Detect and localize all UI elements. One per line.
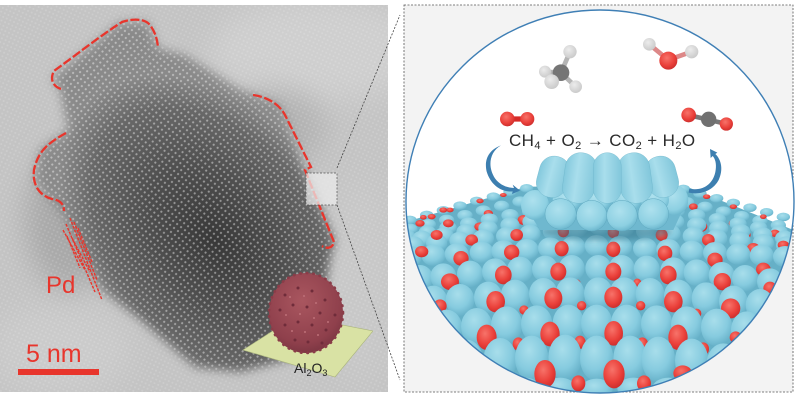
surface row <box>428 278 770 314</box>
selection box <box>306 173 337 205</box>
surface row <box>410 216 791 248</box>
reaction equation: CH <box>509 131 534 150</box>
red dashed outlines of Pd regions <box>34 20 334 248</box>
zoom connector lines <box>337 15 400 380</box>
scale bar <box>18 369 99 375</box>
red atoms row <box>415 215 780 239</box>
red atoms row <box>415 241 771 276</box>
near red atoms <box>534 360 692 391</box>
far surface rows <box>402 184 790 234</box>
scale label: 5 nm: 5 nm <box>26 340 82 368</box>
molecule: water <box>643 38 698 70</box>
reaction equation: 4 <box>534 140 541 152</box>
molecule: oxygen <box>500 112 534 126</box>
circle outline <box>406 10 794 393</box>
label: Al2O3: 3 <box>322 368 327 378</box>
red atoms row <box>477 321 742 356</box>
surface row <box>442 304 755 344</box>
panel: TEM micrograph <box>0 5 388 392</box>
label: Al2O3: Al <box>294 360 306 376</box>
red atoms row <box>433 287 740 318</box>
micrograph background <box>0 5 388 392</box>
surface base <box>407 187 793 400</box>
reaction equation: O <box>682 131 696 150</box>
cluster shadow <box>542 230 674 244</box>
reaction equation: + H <box>642 131 675 150</box>
reaction equation: + O <box>541 131 575 150</box>
reaction equation: 2 <box>575 140 582 152</box>
top rods <box>533 151 682 205</box>
molecule: carbon dioxide <box>681 108 733 131</box>
red atoms row <box>430 229 788 252</box>
rear cluster atoms <box>521 185 688 230</box>
panel: reaction close-up <box>390 5 797 400</box>
reaction equation: → CO <box>582 131 636 150</box>
reaction equation: 2 <box>675 140 682 152</box>
surface row <box>398 235 797 267</box>
molecule: methane <box>539 45 582 93</box>
curved arrow: reactants in <box>486 145 520 194</box>
dashed frame <box>404 5 793 392</box>
label: Pd: Pd <box>46 272 75 299</box>
atom surface with Pd cluster <box>390 38 797 400</box>
plate: Al2O3 support <box>242 324 374 378</box>
label: Al2O3: 2 <box>306 368 311 378</box>
front row atoms <box>545 199 669 231</box>
label: Al2O3: O <box>311 360 322 376</box>
near surface rows <box>467 334 728 392</box>
surface rows middle <box>409 209 788 237</box>
red atoms row <box>441 263 777 295</box>
Pd cluster of rods <box>521 151 688 231</box>
nanoparticle with lattice <box>31 16 340 378</box>
circle background <box>406 10 794 393</box>
reaction equation: 2 <box>636 140 642 152</box>
far red atoms <box>420 193 767 227</box>
surface row <box>418 255 780 290</box>
red lattice marks near Pd label <box>63 218 102 300</box>
sphere: catalyst particle <box>269 273 343 353</box>
curved arrow: products out <box>689 149 721 193</box>
